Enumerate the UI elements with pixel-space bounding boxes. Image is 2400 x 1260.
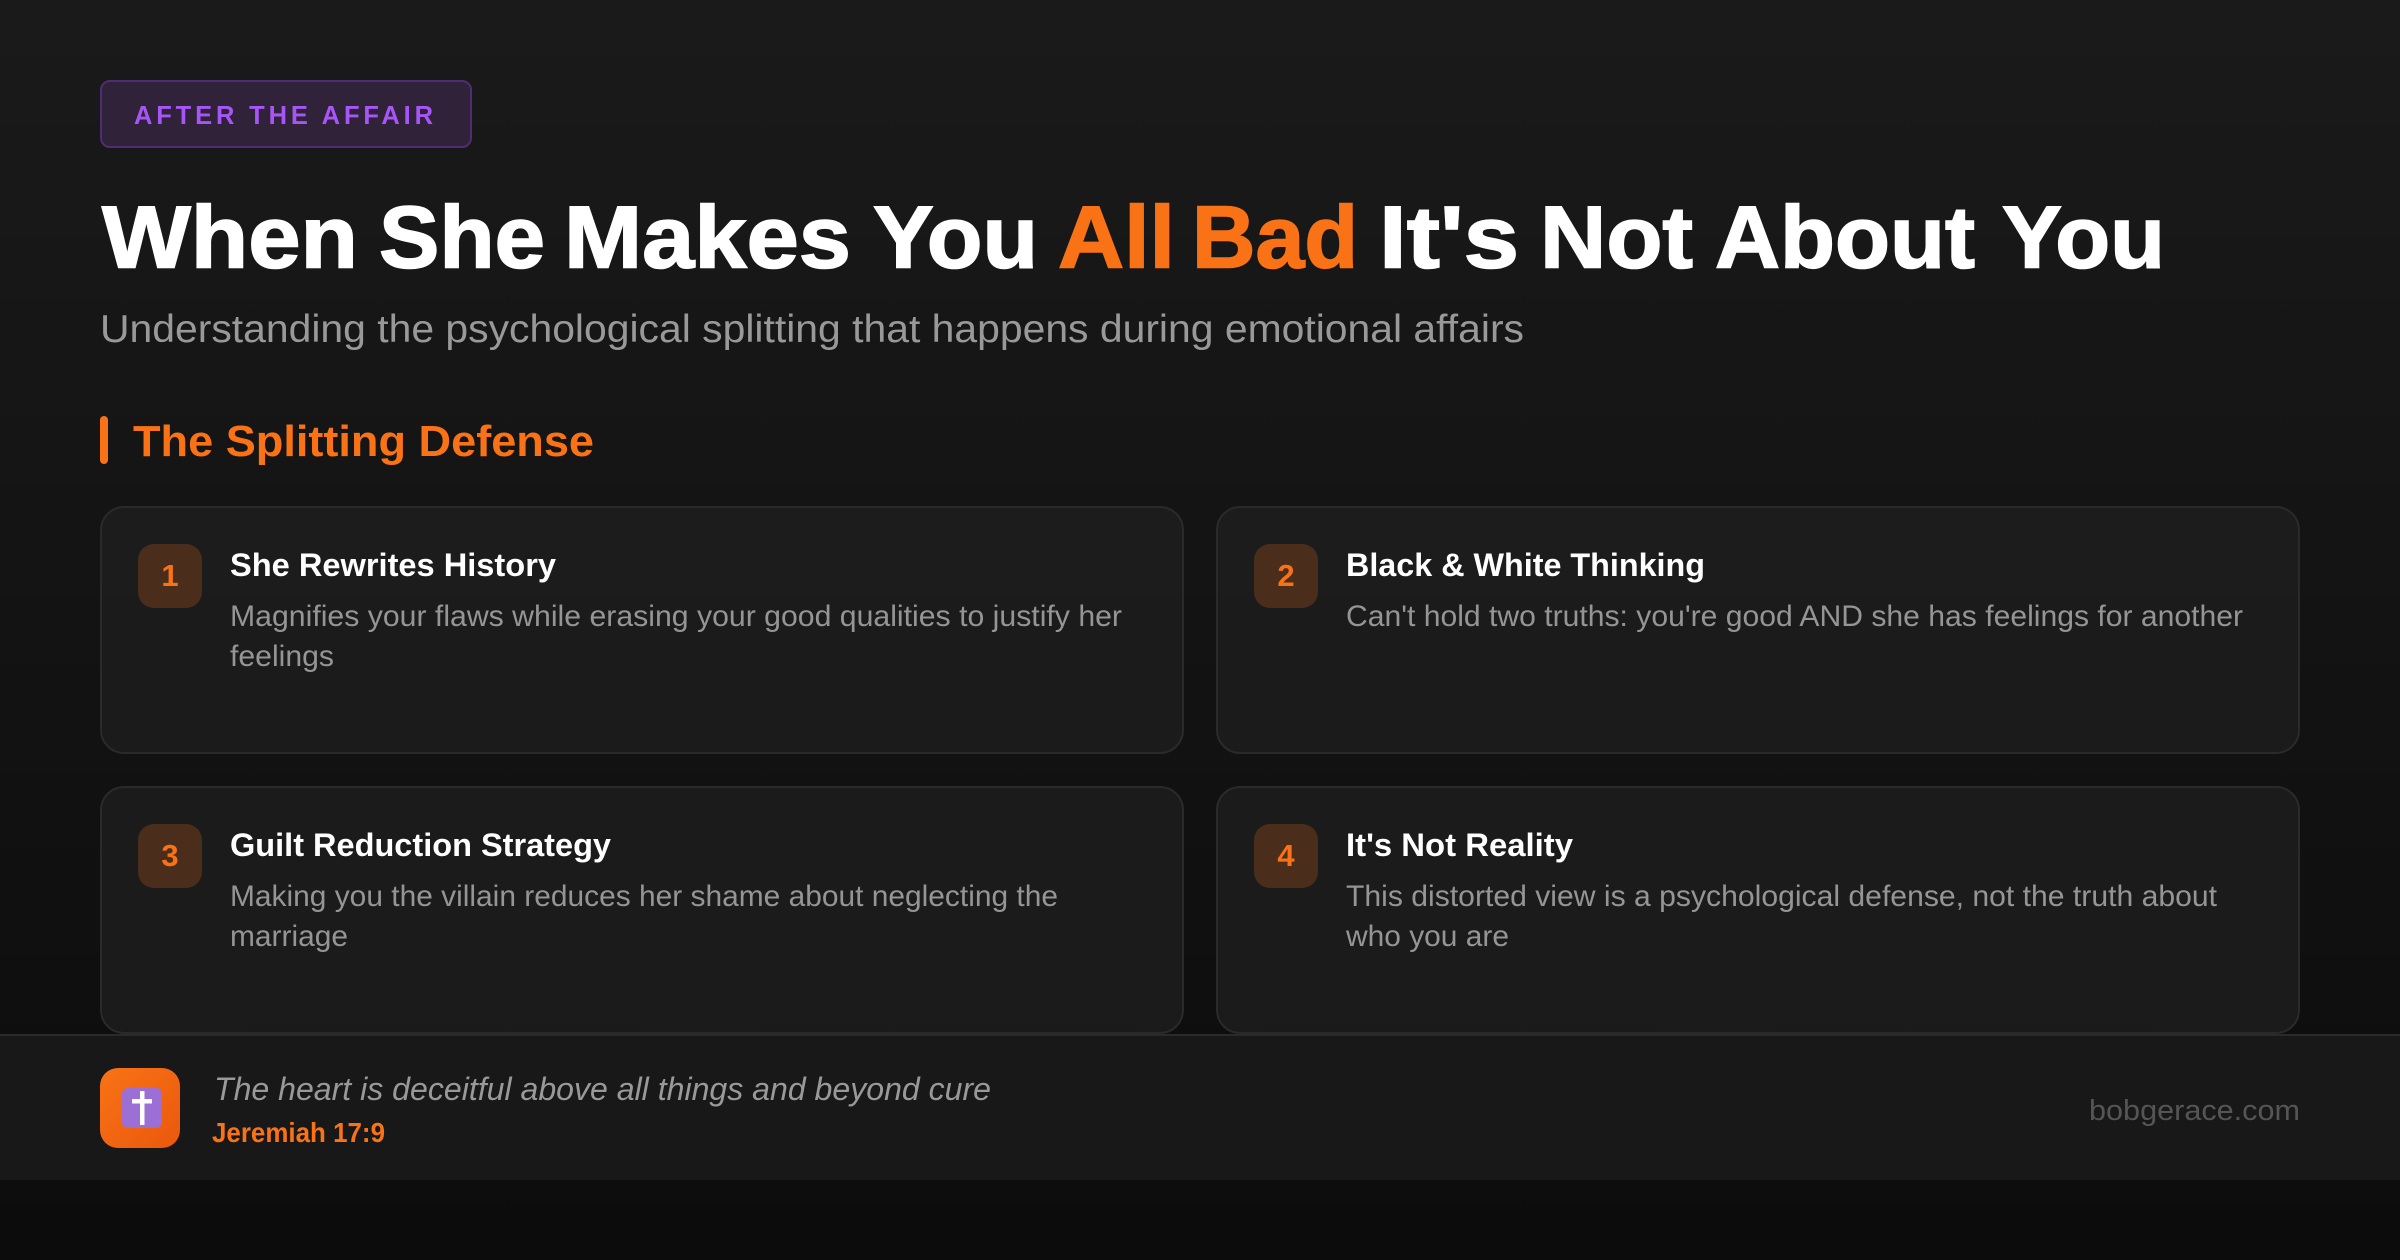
title — [102, 188, 2165, 286]
title: You — [2002, 188, 2165, 286]
card 4: it's not reality — [1217, 787, 2299, 1033]
card 2: black and white thinking — [1217, 507, 2299, 753]
card 4: it's not reality: It's Not Reality — [1346, 827, 1573, 863]
card 3: guilt reduction strategy — [101, 787, 1183, 1033]
card 3: guilt reduction strategy: Making you the villain reduces her shame about neglecting the — [230, 880, 1058, 913]
title: Bad — [1192, 188, 1358, 286]
card 2: black and white thinking: Can't hold two truths: you're good AND she has feelings for another — [1346, 600, 2243, 633]
card 2: black and white thinking: 2 — [1277, 558, 1295, 593]
title: All — [1058, 188, 1175, 286]
card 3: guilt reduction strategy: Guilt Reduction Strategy — [230, 827, 611, 863]
card 3: guilt reduction strategy: 3 — [161, 838, 179, 873]
badge: after the affair: AFTER THE AFFAIR — [134, 102, 433, 130]
title: It's — [1379, 188, 1519, 286]
footer bar — [0, 1034, 2400, 1180]
card 2: black and white thinking: Black & White Thinking — [1346, 547, 1705, 583]
card 1: she rewrites history: Magnifies your flaws while erasing your good qualities to justify her — [230, 600, 1122, 633]
title: When — [102, 188, 358, 286]
icon: cross — [100, 1068, 180, 1148]
card 1: she rewrites history — [101, 507, 1183, 753]
scripture quote: The heart is deceitful above all things and beyond cure — [214, 1071, 991, 1107]
card 3: guilt reduction strategy: marriage — [230, 920, 348, 953]
subtitle: Understanding the psychological splitting that happens during emotional affairs — [100, 308, 1524, 351]
card 4: it's not reality: 4 — [1277, 838, 1295, 873]
card 4: it's not reality: This distorted view is a psychological defense, not the truth about — [1346, 880, 2217, 913]
title: She — [379, 188, 545, 286]
section heading: the splitting defense: The Splitting Defense — [133, 417, 594, 466]
title: Makes — [564, 188, 851, 286]
title: About — [1715, 188, 1975, 286]
card 4: it's not reality: who you are — [1345, 920, 1509, 953]
badge: after the affair — [101, 81, 471, 147]
scripture reference: Jeremiah 17:9 — [212, 1117, 385, 1148]
title: Not — [1540, 188, 1693, 286]
card 1: she rewrites history: 1 — [161, 558, 179, 593]
website: bobgerace.com — [2089, 1095, 2300, 1127]
title: You — [873, 188, 1038, 286]
card 1: she rewrites history: feelings — [230, 640, 334, 673]
card 1: she rewrites history: She Rewrites History — [230, 547, 556, 583]
